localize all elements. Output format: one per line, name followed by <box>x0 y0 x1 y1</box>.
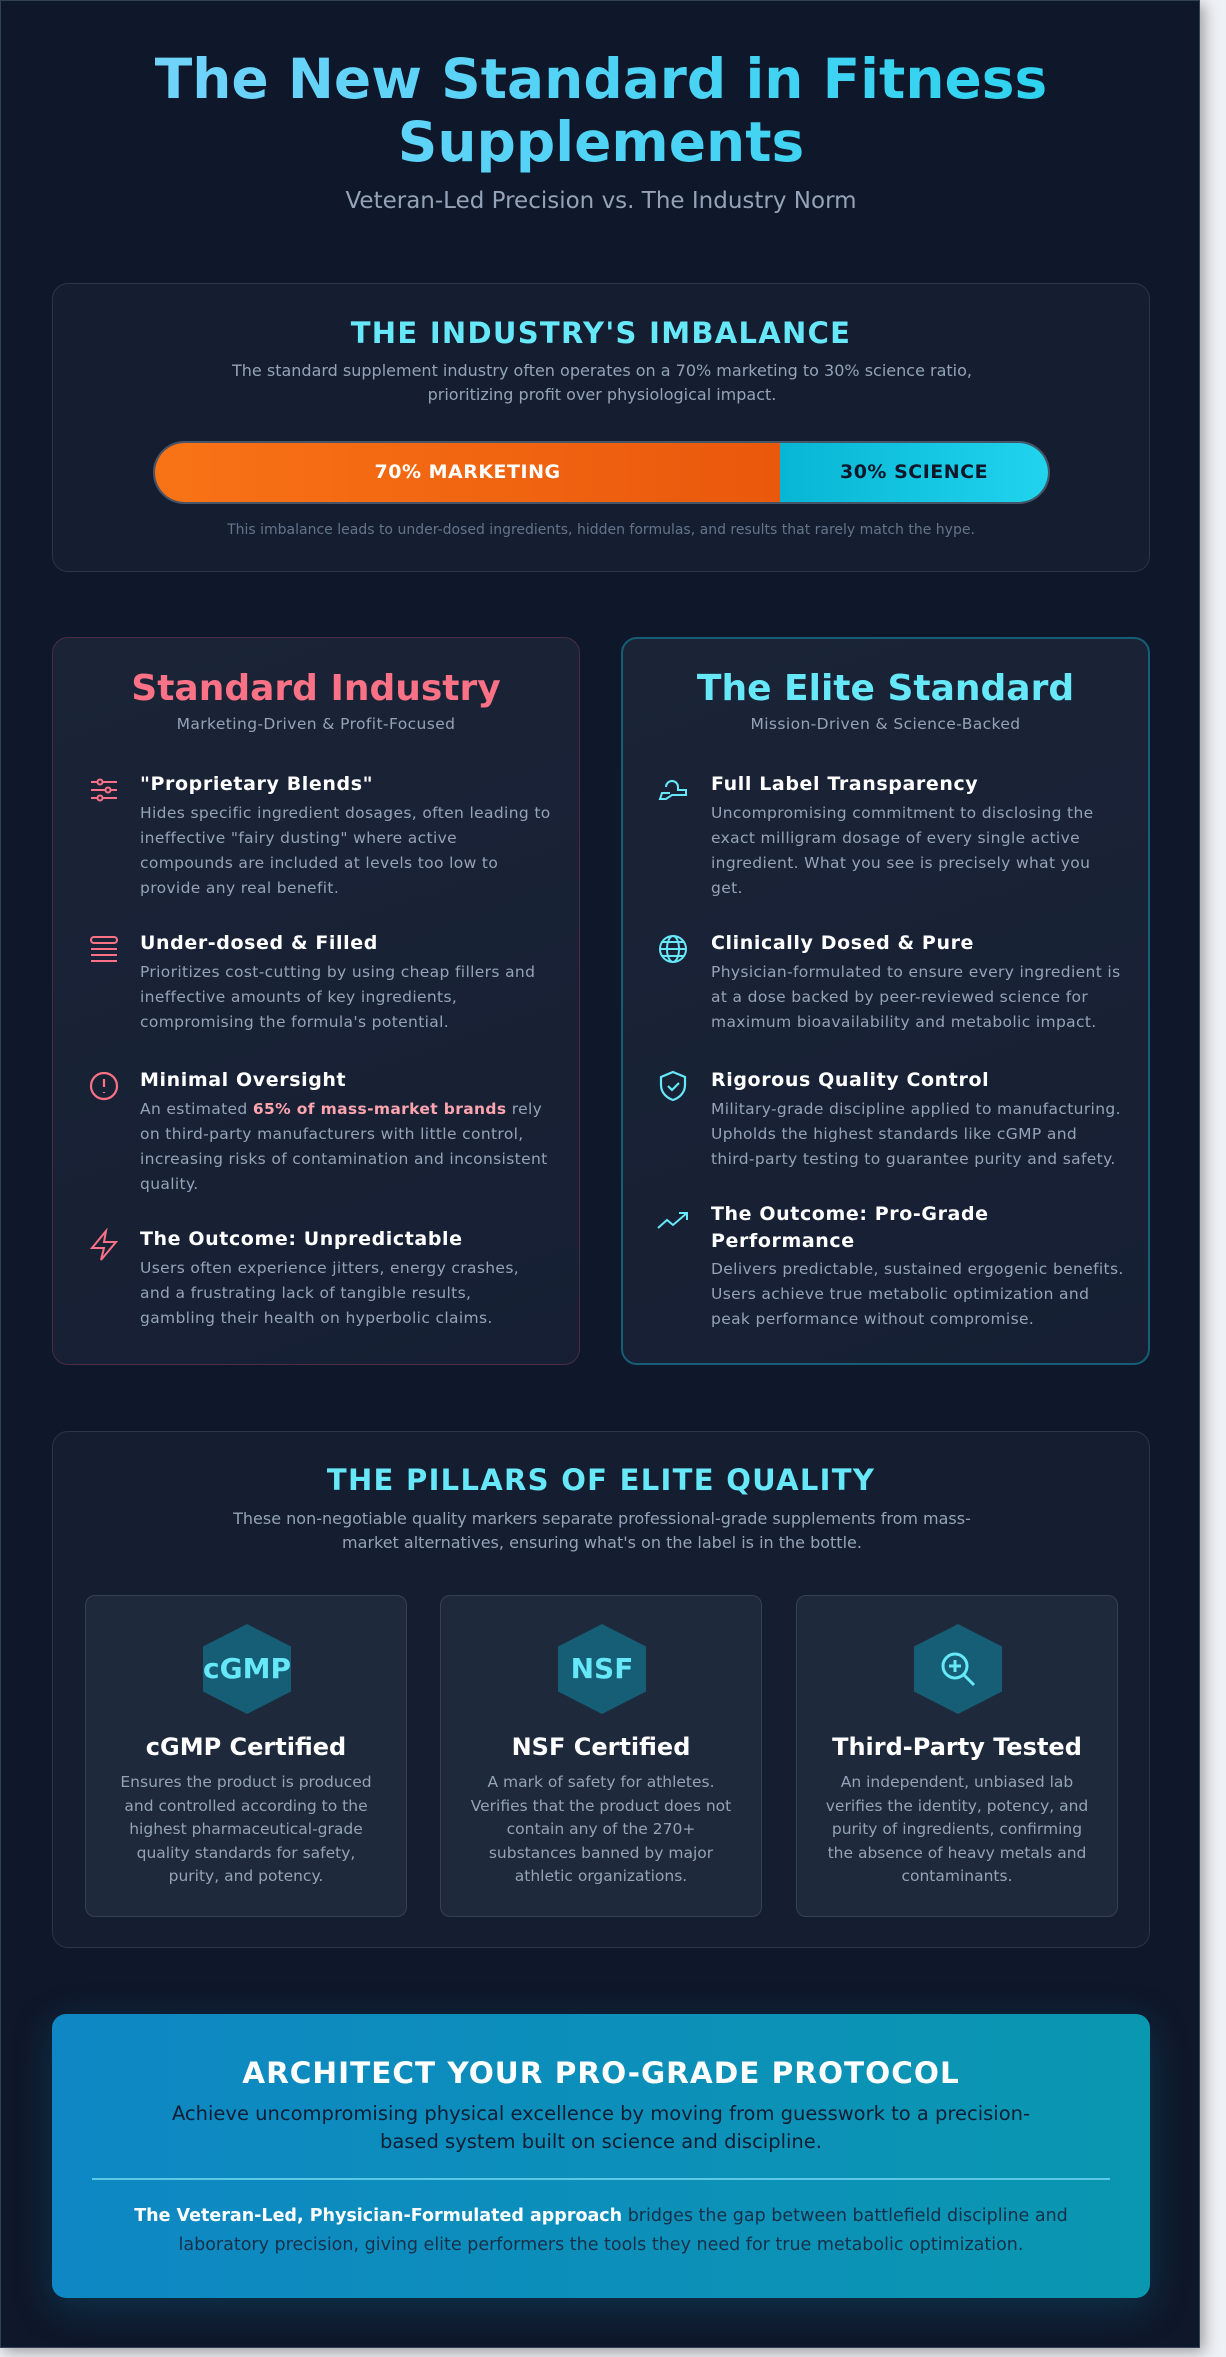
panel: elite standard: Clinically Dosed & Pure <box>711 932 974 954</box>
panel: elite standard <box>621 637 1150 1365</box>
heading: The Elite Standard <box>697 668 1074 709</box>
text block: The standard supplement industry often operates on a 70% marketing to 30% science ratio, prioritizing profit over physiological impact. <box>232 361 972 404</box>
panel: elite standard: Physician-formulated to ensure every ingredient is at a dose backed by peer-reviewed science for maximum bioavailability and metabolic impact. <box>711 963 1121 1031</box>
bar chart: 30% SCIENCE <box>840 461 988 483</box>
title <box>155 47 1047 174</box>
panel: elite standard: Rigorous Quality Control <box>711 1069 989 1091</box>
text block: Achieve uncompromising physical excellence by moving from guesswork to a precision-based system built on science and discipline. <box>172 2102 1030 2153</box>
callout: CTA <box>52 2014 1150 2298</box>
icon: sliders <box>91 778 117 802</box>
icon: lightning <box>90 1228 118 1261</box>
icon: NSF hexagon: NSF <box>571 1652 633 1685</box>
icon: alert <box>90 1072 118 1100</box>
panel: standard industry: An estimated 65% of mass-market brands rely on third-party manufacturers with little control, increasing risks of contamination and inconsistent quality. <box>140 1100 548 1193</box>
heading: THE PILLARS OF ELITE QUALITY <box>327 1463 875 1497</box>
bar chart: 70% MARKETING <box>374 461 561 483</box>
footnote: This imbalance leads to under-dosed ingredients, hidden formulas, and results that rarely match the hype. <box>227 522 975 538</box>
panel: standard industry <box>52 637 580 1365</box>
icon: magnifier hexagon <box>914 1624 1002 1714</box>
icon: label <box>658 780 687 800</box>
card: cGMP <box>85 1595 407 1917</box>
icon: layers <box>90 936 118 962</box>
card: NSF: NSF Certified <box>512 1733 690 1761</box>
text block: approach: The Veteran-Led, Physician-Formulated approach bridges the gap between battlefield discipline and laboratory precision, giving elite performers the tools they need for true metabolic optimization. <box>134 2206 1068 2255</box>
card: NSF <box>440 1595 762 1917</box>
subtitle: Veteran-Led Precision vs. The Industry Norm <box>345 188 857 214</box>
heading: Standard Industry <box>131 668 501 709</box>
icon: shield <box>660 1070 686 1102</box>
item: under-dosed <box>90 932 535 1031</box>
panel: standard industry: Under-dosed & Filled <box>140 932 378 954</box>
title: Supplements <box>398 110 804 174</box>
panel: industry imbalance <box>52 283 1150 572</box>
panel: elite standard: Military-grade discipline applied to manufacturing. Upholds the highest standards like cGMP and third-party testing to guarantee purity and safety. <box>711 1100 1121 1168</box>
item: clinically dosed <box>659 932 1121 1031</box>
panel: elite standard: Full Label Transparency <box>711 773 978 795</box>
heading: ARCHITECT YOUR PRO-GRADE PROTOCOL <box>242 2056 960 2090</box>
card: cGMP: Ensures the product is produced and controlled according to the highest pharmaceutical-grade quality standards for safety, purity, and potency. <box>120 1773 372 1885</box>
icon: globe <box>659 935 687 963</box>
panel: elite standard: Uncompromising commitment to disclosing the exact milligram dosage of every single active ingredient. What you see is precisely what you get. <box>711 804 1094 897</box>
item: proprietary blends <box>91 773 551 897</box>
card: third-party: Third-Party Tested <box>832 1733 1082 1761</box>
panel: standard industry: The Outcome: Unpredictable <box>140 1228 463 1250</box>
item: quality control <box>660 1069 1121 1168</box>
item: outcome <box>90 1228 519 1327</box>
card: NSF: A mark of safety for athletes. Verifies that the product does not contain any of the 270+ substances banned by major athletic organizations. <box>471 1773 731 1885</box>
panel: standard industry: "Proprietary Blends" <box>140 773 373 795</box>
icon: cGMP hexagon <box>203 1624 291 1714</box>
panel: standard industry: Users often experience jitters, energy crashes, and a frustrating lack of tangible results, gambling their health on hyperbolic claims. <box>140 1259 519 1327</box>
panel: standard industry: Prioritizes cost-cutting by using cheap fillers and ineffective amounts of key ingredients, compromising the formula's potential. <box>140 963 535 1031</box>
item: transparency <box>658 773 1094 897</box>
item: outcome <box>657 1203 1124 1328</box>
card: third-party: An independent, unbiased lab verifies the identity, potency, and purity of ingredients, confirming the absence of heavy metals and contaminants. <box>826 1773 1088 1885</box>
card: third-party <box>796 1595 1118 1917</box>
icon: cGMP hexagon: cGMP <box>203 1652 291 1685</box>
icon: trend up <box>657 1212 688 1229</box>
subheading: Marketing-Driven & Profit-Focused <box>177 715 455 733</box>
card: cGMP: cGMP Certified <box>146 1733 346 1761</box>
item: minimal oversight <box>90 1069 548 1193</box>
subheading: Mission-Driven & Science-Backed <box>750 715 1021 733</box>
panel: pillars <box>52 1431 1150 1948</box>
bar chart <box>153 441 1050 504</box>
panel: elite standard: Delivers predictable, sustained ergogenic benefits. Users achieve true metabolic optimization and peak performance without compromise. <box>711 1260 1124 1328</box>
panel: standard industry: Minimal Oversight <box>140 1069 346 1091</box>
heading: THE INDUSTRY'S IMBALANCE <box>351 316 851 350</box>
panel: standard industry: Hides specific ingredient dosages, often leading to ineffective "fairy dusting" where active compounds are included at levels too low to provide any real benefit. <box>140 804 551 897</box>
text block: These non-negotiable quality markers separate professional-grade supplements from mass-market alternatives, ensuring what's on the label is in the bottle. <box>233 1509 971 1552</box>
panel: elite standard: The Outcome: Pro-Grade Performance <box>711 1203 989 1252</box>
icon: NSF hexagon <box>558 1624 646 1714</box>
title: The New Standard in Fitness <box>155 47 1047 111</box>
